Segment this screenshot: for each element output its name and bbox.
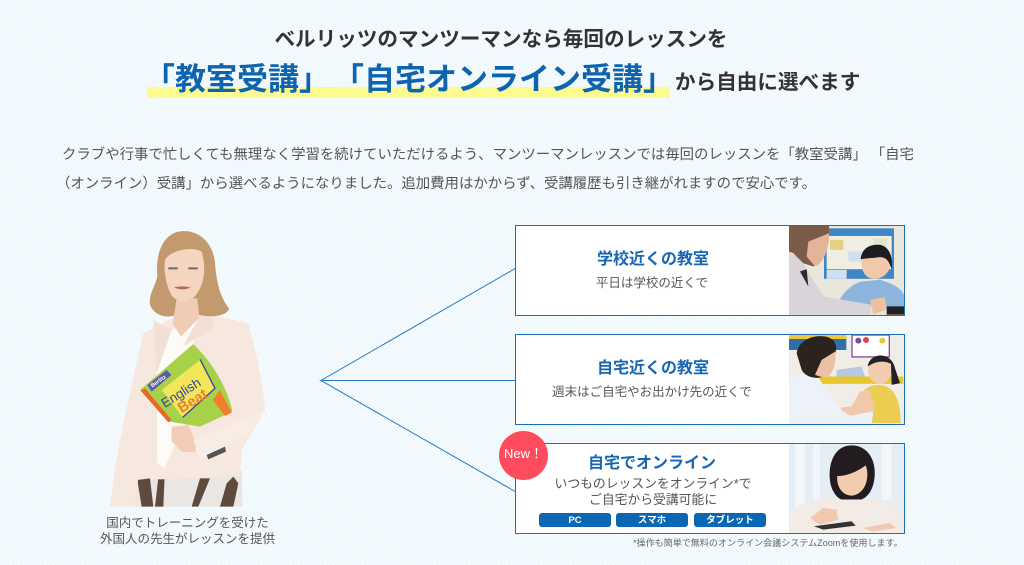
button: tablet	[694, 513, 766, 527]
photo: teacher and boy	[789, 226, 904, 315]
photo: girl with tablet	[789, 444, 904, 533]
title: second line ending: から自由に選べます	[675, 71, 860, 94]
title: second line, online at home: 「自宅オンライン受講」	[333, 62, 674, 97]
title: first line: ベルリッツのマンツーマンなら毎回のレッスンを	[274, 28, 728, 51]
card text: classroom near school: 平日は学校の近くで	[596, 276, 708, 290]
illustration: teacher holding textbook: Beat	[175, 386, 211, 417]
illustration: teacher holding textbook: English	[158, 375, 203, 411]
text: （オンライン）受講」から選べるようになりました。追加費用はかからず、受講履歴も引き継がれますので安心です。	[56, 176, 816, 192]
button: PC: PC	[568, 515, 582, 526]
illustration: teacher holding textbook	[110, 231, 265, 507]
card heading: online at home: 自宅でオンライン	[588, 455, 716, 472]
card text: online at home: いつものレッスンをオンライン*で	[555, 476, 751, 491]
badge: New: New！	[504, 446, 543, 461]
button: tablet: タブレット	[706, 515, 754, 526]
card: classroom near home	[515, 334, 905, 425]
title: second line, classroom: 「教室受講」	[144, 62, 330, 97]
card: online at home	[515, 443, 905, 534]
illustration: teacher holding textbook: Berlitz	[150, 374, 168, 389]
card: classroom near school	[515, 225, 905, 316]
button: smartphone	[616, 513, 688, 527]
footnote: *操作も簡単で無料のオンライン会議システムZoomを使用します。	[633, 538, 903, 548]
badge: New	[499, 431, 548, 480]
card heading: classroom near school: 学校近くの教室	[597, 251, 709, 268]
intro paragraph	[56, 146, 914, 192]
card text: online at home	[555, 476, 751, 507]
teacher caption: 国内でトレーニングを受けた	[106, 516, 269, 530]
card text: online at home: ご自宅から受講可能に	[589, 492, 717, 507]
card text: classroom near home: 週末はご自宅やお出かけ先の近くで	[552, 385, 752, 399]
card heading: classroom near home: 自宅近くの教室	[597, 360, 709, 377]
title highlight band	[147, 87, 670, 98]
photo: teacher and girl	[789, 335, 904, 424]
button: smartphone: スマホ	[638, 515, 666, 526]
text: クラブや行事で忙しくても無理なく学習を続けていただけるよう、マンツーマンレッスンでは毎回のレッスンを「教室受講」 「自宅	[62, 147, 914, 163]
teacher caption: 外国人の先生がレッスンを提供	[100, 532, 275, 546]
teacher caption	[100, 516, 275, 546]
button: PC	[539, 513, 611, 527]
